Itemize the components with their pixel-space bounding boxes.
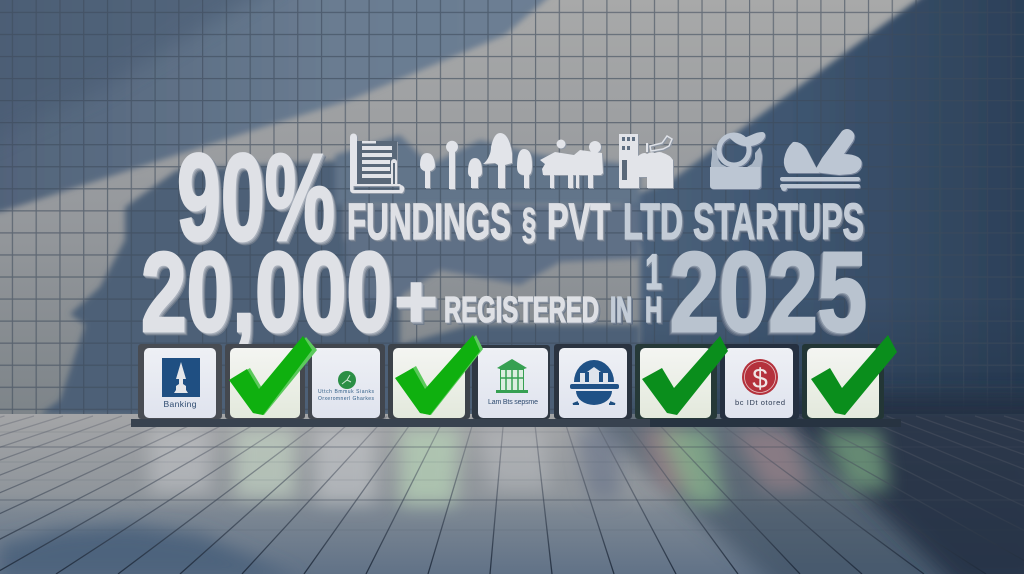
icon: row of shovels and trees: [420, 133, 532, 189]
headline: registered in h1: IN: [610, 289, 632, 330]
headline: 90%: 90%: [177, 130, 335, 267]
icon: green check 3: [642, 336, 728, 415]
icon: green check 2: [395, 335, 483, 415]
tile: banking: [144, 348, 216, 418]
icon: meeting people at table: [540, 140, 603, 188]
headline: 20,000+: +: [395, 262, 437, 342]
headline: fundings and pvt ltd startups: [347, 193, 864, 250]
tile: blue bank emblem: [559, 348, 627, 418]
headline: 2025: 2025: [670, 229, 867, 355]
headline: fundings and pvt ltd startups: FUNDINGS: [347, 193, 511, 250]
tile: green seal: Uttch Bmmuk Sianks: [318, 389, 374, 395]
tile: green temple: [478, 348, 548, 418]
icon: green check 1: [229, 336, 317, 415]
icon: magnifier over basket: [710, 132, 765, 189]
tile: check 3: [640, 348, 711, 418]
headline: registered in h1: H: [645, 289, 662, 330]
icon: factory building: [619, 134, 673, 188]
tile: banking: Banking: [164, 399, 197, 409]
headline: registered in h1: REGISTERED: [444, 289, 599, 330]
wall background: [0, 0, 1024, 425]
tile: red dollar seal: [725, 348, 793, 418]
tile: green seal: [312, 348, 380, 418]
icon: green check 4: [811, 335, 897, 415]
headline: registered in h1: [444, 244, 662, 330]
tile: check 1: [230, 348, 300, 418]
shelf with tile row: [131, 344, 901, 427]
headline: registered in h1: 1: [645, 244, 662, 300]
tile: red dollar seal: bc IDt otored: [735, 398, 785, 407]
tile: red dollar seal: $: [752, 363, 768, 394]
icon: document stack: [350, 134, 404, 193]
floor: [0, 395, 1024, 574]
headline: 20,000+: 20,000: [141, 229, 392, 355]
icon: check mark on leaves and bars: [780, 129, 862, 191]
tile: check 4: [807, 348, 879, 418]
tile: check 2: [393, 348, 465, 418]
headline: fundings and pvt ltd startups: §: [522, 199, 536, 248]
headline: fundings and pvt ltd startups: LTD: [623, 193, 683, 250]
headline: fundings and pvt ltd startups: PVT: [547, 193, 610, 250]
tile: green temple: Lam Bts sepsme: [488, 399, 538, 406]
tile: green seal: Orxeromnerl Gharkes: [318, 396, 374, 402]
headline: fundings and pvt ltd startups: STARTUPS: [693, 193, 864, 250]
